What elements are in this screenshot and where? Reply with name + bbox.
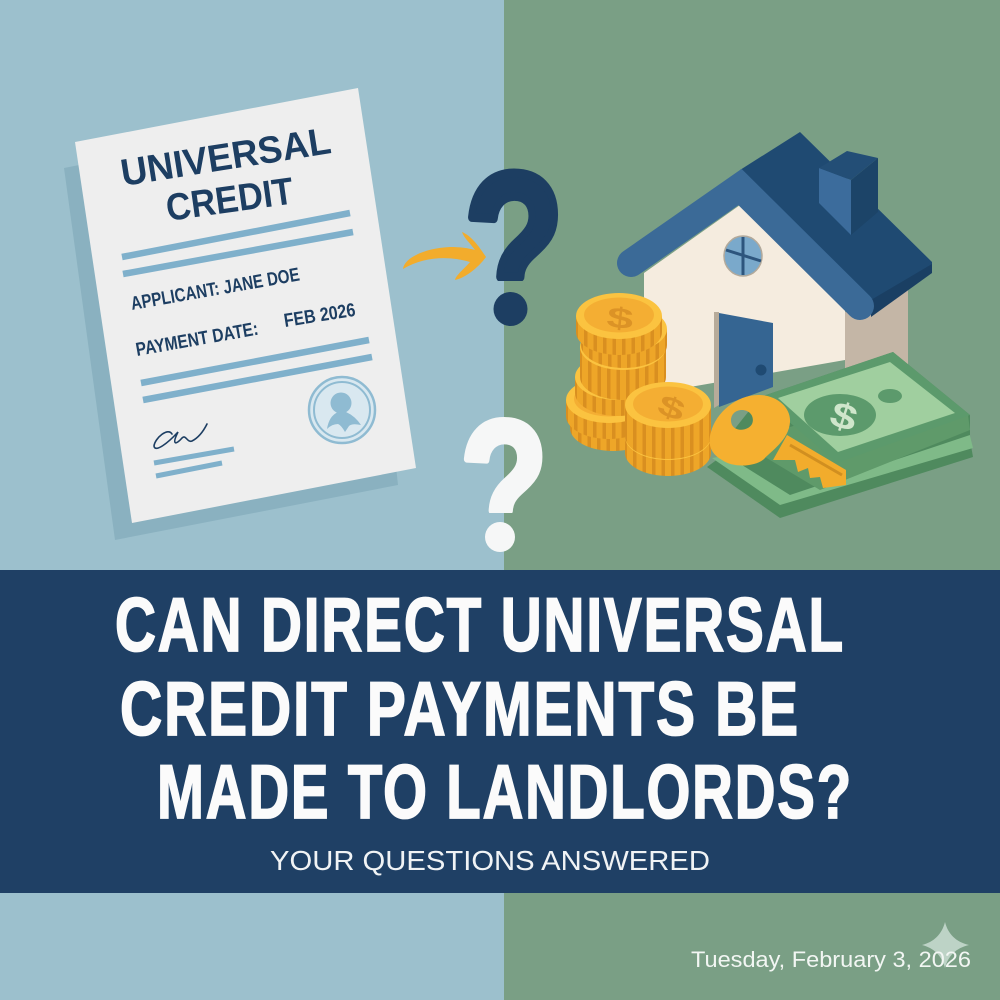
round window bbox=[724, 236, 762, 276]
document illustration bbox=[64, 88, 416, 540]
headline: CREDIT PAYMENTS BE bbox=[120, 667, 800, 752]
chimney bbox=[819, 168, 851, 235]
coin stack: small bbox=[625, 382, 711, 476]
door knob bbox=[756, 364, 766, 376]
question mark: navy: ? bbox=[464, 129, 564, 366]
coin dollar sign: $ bbox=[605, 301, 635, 336]
key bbox=[709, 395, 846, 488]
stamp with person bbox=[309, 377, 375, 443]
question mark: white: ? bbox=[460, 382, 548, 588]
headline bbox=[115, 583, 853, 835]
document heading: CREDIT bbox=[163, 171, 296, 230]
date: Tuesday, February 3, 2026 bbox=[691, 947, 971, 972]
question mark: navy bbox=[468, 168, 558, 326]
signature bbox=[154, 424, 207, 448]
roof front band bbox=[631, 187, 860, 306]
door bbox=[714, 312, 719, 408]
bill dollar sign: $ bbox=[825, 393, 863, 439]
house bbox=[631, 132, 932, 408]
document shadow bbox=[64, 110, 398, 540]
arrow bbox=[403, 232, 486, 280]
document rules bbox=[122, 213, 372, 400]
bill dot bbox=[878, 389, 902, 403]
roof back slope bbox=[740, 132, 932, 310]
cash stack bbox=[707, 352, 973, 518]
background: right panel bbox=[504, 0, 1000, 1000]
bill portrait oval bbox=[804, 394, 876, 436]
subtitle: YOUR QUESTIONS ANSWERED bbox=[270, 845, 710, 876]
coin dollar sign: $ bbox=[653, 388, 689, 428]
question mark: white bbox=[464, 417, 542, 552]
background: left panel bbox=[0, 0, 504, 1000]
applicant fields: FEB 2026 bbox=[282, 300, 357, 332]
applicant fields: PAYMENT DATE: bbox=[134, 319, 260, 361]
sparkle bbox=[922, 922, 969, 968]
signature rules bbox=[154, 449, 234, 476]
document heading: UNIVERSAL bbox=[118, 120, 334, 195]
applicant fields: APPLICANT: JANE DOE bbox=[129, 265, 301, 315]
coin stack: large bbox=[566, 293, 667, 451]
house side wall bbox=[845, 285, 908, 380]
applicant fields bbox=[129, 265, 357, 361]
document heading bbox=[118, 120, 334, 230]
document sheet bbox=[75, 88, 416, 523]
banner bbox=[0, 570, 1000, 893]
house front wall bbox=[644, 205, 845, 395]
